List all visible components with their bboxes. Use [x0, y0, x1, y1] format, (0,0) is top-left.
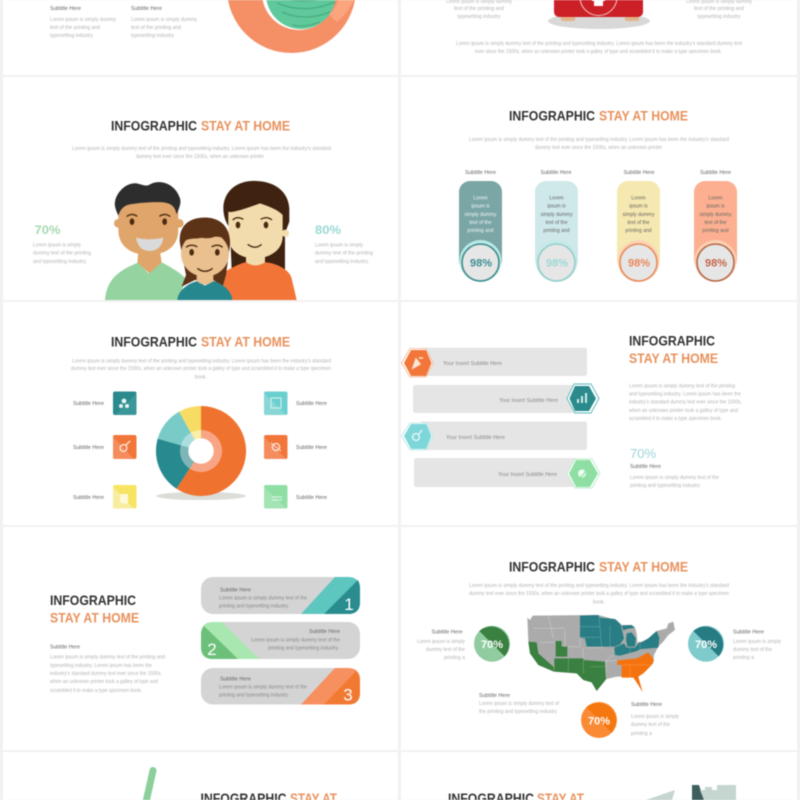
- text block: bottom left caption: the printing and typesetting industry: [479, 709, 557, 715]
- icon: yellow square: [113, 485, 136, 508]
- title: STAY AT HOME: [599, 560, 688, 574]
- illustration: family of three: [105, 181, 297, 300]
- panel: top left cropped donut: [3, 0, 398, 75]
- text block: left caption: text of the printing and: [454, 6, 504, 12]
- stat: 80 percent: [315, 223, 373, 265]
- right labels: Subtitle Here: [296, 401, 327, 407]
- text block: right caption: [733, 630, 781, 661]
- card: yellow pill: ipsum is: [629, 204, 648, 210]
- text block: description: book.: [593, 600, 605, 606]
- card: number 2: [201, 622, 360, 659]
- card: yellow pill: Lorem: [631, 196, 646, 202]
- stat: 70 percent: Lorem ipsum is simply: [33, 242, 81, 248]
- stat: 80 percent: Lorem ipsum is simply: [315, 242, 363, 248]
- text block: left caption: dummy text of the: [426, 647, 465, 653]
- card: salmon pill: simply dummy: [700, 212, 732, 218]
- stat: 70 percent: 70%: [34, 223, 61, 237]
- title: [50, 593, 139, 626]
- text block: description: [71, 358, 331, 380]
- text block: description: when an unknown printer took a galley of type and: [50, 679, 158, 685]
- text block: right caption: typesetting industry: [698, 14, 741, 20]
- text block: description: Subtitle Here: [50, 644, 80, 650]
- text block: description: book.: [195, 374, 207, 380]
- card: salmon pill: [694, 170, 737, 282]
- row: light teal hexagon: [402, 422, 587, 450]
- panel: bottom right cropped slide: [401, 752, 797, 800]
- text block: subtitle column one: [50, 6, 116, 39]
- panel: bottom left cropped slide: [3, 752, 398, 800]
- text block: right caption: Lorem ipsum is simply: [733, 639, 781, 645]
- title: INFOGRAPHIC: [509, 560, 595, 574]
- chart: teal 70 percent circle: [688, 626, 724, 662]
- text block: bottom right caption: printing a: [631, 731, 652, 737]
- card: pale blue pill: Subtitle Here: [540, 170, 572, 176]
- chart: green 70 percent circle: [474, 626, 510, 662]
- title: INFOGRAPHIC: [509, 108, 595, 124]
- left labels: Subtitle Here: [73, 401, 104, 407]
- text block: left caption: [417, 630, 465, 661]
- text block: subtitle column two: Lorem ipsum is simply dummy: [131, 17, 197, 23]
- card: pale blue pill: simply dummy: [541, 212, 573, 218]
- text block: subtitle column two: Subtitle Here: [131, 6, 162, 12]
- row: teal hexagon: [413, 384, 599, 413]
- title: INFOGRAPHIC: [111, 334, 197, 350]
- card: number 1: Subtitle Here: [220, 588, 251, 594]
- row: light teal hexagon: Your Insert Subtitle Here: [446, 435, 505, 441]
- text block: left caption: printing a: [444, 655, 465, 661]
- card: number 2: printing and typesetting industry.: [268, 646, 339, 652]
- card: pale blue pill: text of the: [546, 220, 568, 226]
- woman: [217, 181, 297, 300]
- card: number 3: Lorem ipsum is simply dummy text of the: [219, 684, 307, 690]
- card: pale blue pill: [535, 170, 578, 282]
- title: [111, 118, 290, 134]
- icon: first aid case: [548, 0, 650, 29]
- card: pale blue pill: printing and: [543, 228, 570, 234]
- stat: 70 percent: Subtitle Here: [630, 464, 661, 470]
- text block: left caption: Subtitle Here: [432, 630, 463, 636]
- chart: donut: [156, 406, 246, 500]
- right labels: Subtitle Here: [296, 445, 327, 451]
- card: teal pill: text of the: [470, 220, 492, 226]
- stat: 80 percent: and typesetting industry.: [315, 259, 369, 265]
- text block: right caption: [686, 0, 752, 20]
- text block: description: Lorem ipsum is simply dummy text of the printing and typesetting industry. Lorem ipsum has been the industry's standard: [72, 146, 331, 152]
- text block: subtitle column one: text of the printing and: [50, 25, 100, 31]
- card: number 1: [201, 577, 360, 614]
- text block: description: [469, 583, 729, 606]
- text block: description: when an unknown printer took a galley of type and: [629, 408, 738, 414]
- card: salmon pill: 98%: [705, 258, 727, 270]
- text block: description: dummy text ever since the 1500s, when an unknown printer: [535, 145, 662, 151]
- card: yellow pill: 98%: [628, 258, 650, 270]
- text block: right caption: text of the printing and: [694, 6, 744, 12]
- stat: 70 percent: [33, 223, 91, 265]
- card: salmon pill: ipsum is: [706, 204, 725, 210]
- card: salmon pill: text of the: [705, 220, 727, 226]
- text block: left caption: [446, 0, 512, 20]
- left labels: [73, 401, 104, 501]
- card: pale blue pill: ipsum is: [547, 204, 566, 210]
- stat: 70 percent: dummy text of the printing: [33, 250, 91, 256]
- text block: description: Lorem ipsum is simply dummy text of the printing and: [50, 654, 165, 660]
- card: yellow pill: [617, 170, 660, 282]
- panel: hexagon list: [401, 302, 797, 525]
- row: green hexagon: [414, 458, 600, 488]
- text block: description: Lorem ipsum is simply dummy text of the printing and typesetting industry. Lorem ipsum has been the industry's standard: [469, 137, 729, 143]
- icon: orange square left: [113, 435, 136, 459]
- title: [509, 108, 688, 124]
- text block: bottom left caption: [479, 693, 560, 715]
- icon: green square: [264, 485, 288, 508]
- card: yellow pill: simply dummy: [623, 212, 655, 218]
- text block: description: scrambled it to make a type specimen book.: [629, 416, 722, 422]
- title: STAY AT HOME: [599, 108, 688, 124]
- text block: footer description: ever since the 1500s, when an unknown printer took a galley of type and scrambled it to make a type specimen book.: [475, 49, 722, 55]
- text block: bottom right caption: Lorem ipsum is simply: [631, 714, 679, 720]
- title: STAY AT HOME: [201, 334, 290, 350]
- text block: bottom right caption: Subtitle Here: [631, 702, 662, 708]
- card: number 3: Subtitle Here: [220, 676, 251, 682]
- text block: description: [629, 384, 742, 422]
- text block: description: Lorem ipsum is simply dummy text of the printing and typesetting industry. Lorem ipsum has been the industry's standard: [469, 583, 729, 589]
- row: teal hexagon: Your Insert Subtitle Here: [499, 398, 558, 404]
- icon: orange square right: [264, 435, 288, 459]
- text block: subtitle column one: Subtitle Here: [50, 6, 81, 12]
- child: [177, 218, 232, 300]
- card: salmon pill: printing and: [702, 228, 729, 234]
- panel: four pill cards: [401, 77, 797, 300]
- chart: teal 70 percent circle: 70%: [695, 639, 717, 651]
- right labels: [296, 401, 327, 501]
- card: number 2: Subtitle Here: [309, 629, 340, 635]
- card: teal pill: ipsum is: [471, 204, 490, 210]
- text block: subtitle column two: [131, 6, 197, 39]
- title: STAY AT HOME: [201, 118, 290, 134]
- row: orange hexagon: [402, 348, 587, 377]
- text block: right caption: Subtitle Here: [733, 630, 764, 636]
- card: salmon pill: Lorem: [708, 196, 723, 202]
- text block: description: [50, 644, 165, 694]
- text block: left caption: Lorem ipsum is simply: [417, 639, 465, 645]
- panel: top right first aid kit: [401, 0, 797, 75]
- chart: US choropleth map: [527, 615, 675, 692]
- text block: description: [72, 146, 331, 160]
- stat: 70 percent: printing and typesetting industry: [630, 483, 700, 489]
- text block: description: Lorem ipsum is simply dummy text of the printing: [629, 384, 735, 390]
- text block: description: typesetting industry. Lorem ipsum has been the: [50, 663, 152, 669]
- card: pale blue pill: Lorem: [549, 196, 564, 202]
- text block: bottom right caption: dummy text of the: [631, 722, 670, 728]
- icon: teal square: [113, 392, 136, 415]
- title: [629, 334, 718, 366]
- card: number 2: 2: [207, 640, 217, 659]
- card: number 1: 1: [344, 595, 354, 614]
- card: teal pill: [459, 170, 502, 282]
- text block: description: dummy text ever since the 1500s, when an unknown printer: [136, 154, 264, 160]
- text block: right caption: printing a: [733, 655, 754, 661]
- text block: description: and typesetting industry. Lorem ipsum has been the: [629, 392, 741, 398]
- text block: subtitle column two: typesetting industry: [131, 33, 174, 39]
- chart: orange 70 percent circle: 70%: [588, 715, 610, 727]
- title: STAY AT HOME: [50, 610, 139, 626]
- stat: 70 percent: [630, 447, 719, 489]
- title: STAY AT HOME: [629, 351, 718, 366]
- text block: footer description: [456, 41, 743, 55]
- stat: 70 percent: 70%: [630, 447, 656, 461]
- title: [509, 560, 688, 574]
- chart: orange 70 percent circle: [581, 702, 617, 738]
- card: number 3: printing and typesetting industry.: [219, 692, 289, 698]
- icon: light teal square: [264, 392, 288, 415]
- stat: 70 percent: and typesetting industry.: [33, 259, 87, 265]
- card: teal pill: Lorem: [473, 196, 488, 202]
- man: [105, 182, 185, 300]
- title: [200, 791, 338, 800]
- card: number 3: 3: [343, 686, 353, 704]
- card: yellow pill: text of the: [628, 220, 650, 226]
- card: number 1: printing and typesetting industry.: [219, 604, 289, 610]
- illustration: castle and wing: [646, 785, 736, 800]
- panel: family illustration: [3, 77, 398, 300]
- panel: donut chart with icons: [3, 302, 398, 525]
- text block: description: scrambled it to make a type specimen book.: [50, 688, 142, 694]
- text block: subtitle column one: Lorem ipsum is simply dummy: [50, 17, 116, 23]
- text block: left caption: typesetting industry: [458, 14, 501, 20]
- stat: 80 percent: dummy text of the printing: [315, 250, 373, 256]
- text block: description: dummy text ever since the 1500s, when an unknown printer took a galley of type and scrambled it to make a type specimen: [71, 366, 331, 372]
- card: number 3: [201, 668, 360, 704]
- left labels: Subtitle Here: [73, 495, 104, 501]
- left labels: Subtitle Here: [73, 445, 104, 451]
- text block: description: [469, 137, 729, 151]
- card: salmon pill: Subtitle Here: [700, 170, 731, 176]
- title: INFOGRAPHIC: [111, 118, 197, 134]
- row: orange hexagon: Your Insert Subtitle Here: [443, 361, 502, 367]
- card: yellow pill: Subtitle Here: [624, 170, 655, 176]
- card: teal pill: printing and: [467, 228, 494, 234]
- card: teal pill: 98%: [470, 258, 492, 270]
- card: number 2: Lorem ipsum is simply dummy text of the: [251, 638, 340, 644]
- text block: description: industry's standard dummy text ever since the 1500s,: [629, 400, 742, 406]
- text block: subtitle column one: typesetting industry: [50, 33, 93, 39]
- card: pale blue pill: 98%: [546, 258, 568, 270]
- title: INFOGRAPHIC: [629, 334, 715, 348]
- text block: subtitle column two: text of the printing and: [131, 25, 181, 31]
- text block: description: industry's standard dummy text ever since the 1500s,: [50, 671, 162, 677]
- text block: description: dummy text ever since the 1500s, when an unknown printer took a galley of type and scrambled it to make a type specimen: [469, 591, 729, 597]
- text block: description: Lorem ipsum is simply dummy text of the printing and typesetting industry. Lorem ipsum has been the industry's standard: [72, 358, 331, 364]
- text block: bottom left caption: Subtitle Here: [479, 693, 510, 699]
- text block: right caption: dummy text of the: [733, 647, 772, 653]
- card: number 1: Lorem ipsum is simply dummy text of the: [219, 596, 307, 602]
- card: teal pill: simply dummy: [465, 212, 497, 218]
- chart: green 70 percent circle: 70%: [481, 639, 503, 651]
- icon: orange ring with green mask: [227, 0, 356, 53]
- text block: bottom right caption: [631, 702, 679, 737]
- panel: numbered bars: [3, 527, 398, 750]
- title: INFOGRAPHIC: [50, 593, 136, 608]
- title: [111, 334, 290, 350]
- card: yellow pill: printing and: [625, 228, 652, 234]
- row: green hexagon: Your Insert Subtitle Here: [498, 472, 557, 478]
- text block: bottom left caption: Lorem ipsum is simply dummy text of: [479, 701, 560, 707]
- stat: 80 percent: 80%: [315, 223, 341, 237]
- card: teal pill: Subtitle Here: [465, 170, 496, 176]
- illustration: green stick: [146, 770, 153, 800]
- stat: 70 percent: Lorem ipsum is simply dummy text of the: [630, 475, 719, 481]
- panel: US map: [401, 527, 797, 750]
- text block: footer description: Lorem ipsum is simply dummy text of the printing and typesetting industry. Lorem ipsum has been the industry's standard dummy text: [456, 41, 743, 47]
- right labels: Subtitle Here: [296, 495, 327, 501]
